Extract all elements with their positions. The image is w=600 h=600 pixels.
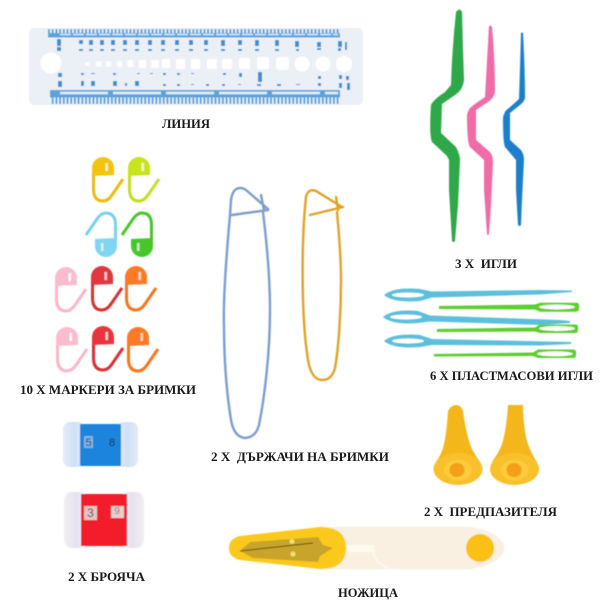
row counters bbox=[63, 422, 144, 548]
left point protector bbox=[434, 405, 482, 485]
label: cable needles: 3 Х ИГЛИ bbox=[455, 256, 517, 271]
label: scissors: НОЖИЦА bbox=[338, 585, 399, 600]
blue cable needle bbox=[503, 32, 525, 226]
ruler bottom scale bbox=[50, 90, 340, 104]
label: stitch markers: 10 Х МАРКЕРИ ЗА БРИМКИ bbox=[20, 382, 196, 397]
point protectors bbox=[434, 405, 539, 485]
blue needle 1 bbox=[384, 289, 572, 301]
marker: yellow bbox=[92, 157, 123, 201]
marker: lime bbox=[128, 157, 159, 201]
green needle 1 bbox=[439, 303, 579, 312]
ruler top scale bbox=[48, 29, 340, 38]
label: stitch holders: 2 Х ДЪРЖАЧИ НА БРИМКИ bbox=[211, 449, 389, 464]
orange stitch holder bbox=[303, 190, 343, 380]
marker: light blue bbox=[86, 213, 117, 257]
ruler size marks bbox=[57, 39, 350, 90]
label: point protectors: 2 Х ПРЕДПАЗИТЕЛЯ bbox=[424, 504, 558, 519]
label: row counters: 2 Х БРОЯЧА bbox=[68, 569, 146, 584]
green cable needle bbox=[430, 10, 464, 242]
scissors spring strip bbox=[347, 545, 375, 552]
blue row counter: 5 bbox=[85, 437, 92, 449]
scissors yellow button bbox=[466, 534, 494, 562]
stitch holders bbox=[224, 188, 343, 438]
blue row counter bbox=[63, 422, 138, 467]
red row counter bbox=[64, 492, 144, 548]
label: ruler: ЛИНИЯ bbox=[162, 116, 211, 131]
marker: red 2 bbox=[92, 326, 123, 370]
green needle 2 bbox=[437, 324, 578, 333]
blue needle 3 bbox=[384, 335, 571, 347]
pink cable needle bbox=[467, 26, 495, 235]
scissors yellow cap bbox=[229, 527, 346, 569]
marker: green bbox=[122, 213, 153, 257]
cable needles bbox=[430, 10, 525, 242]
ruler gauge holes bbox=[40, 52, 352, 74]
label: plastic needles: 6 Х ПЛАСТМАСОВИ ИГЛИ bbox=[430, 368, 593, 383]
blue needle 2 bbox=[383, 311, 570, 325]
ruler body bbox=[29, 28, 363, 105]
marker: pink 1 bbox=[55, 267, 86, 311]
marker: red 1 bbox=[91, 266, 122, 310]
blue row counter: 8 bbox=[109, 437, 115, 449]
scissors cream handle bbox=[320, 527, 504, 569]
marker: orange 1 bbox=[125, 266, 156, 310]
marker: pink 2 bbox=[56, 327, 87, 371]
stitch markers bbox=[55, 157, 159, 371]
ruler bbox=[29, 28, 363, 105]
scissors bbox=[229, 527, 504, 569]
right point protector bbox=[490, 405, 539, 485]
scissors blade bbox=[240, 537, 333, 562]
plastic needles bbox=[383, 289, 579, 358]
red row counter: 9 bbox=[114, 506, 120, 517]
green needle 3 bbox=[434, 350, 576, 358]
red row counter: 3 bbox=[87, 506, 94, 520]
blue stitch holder bbox=[224, 188, 270, 438]
marker: orange 2 bbox=[127, 327, 158, 371]
